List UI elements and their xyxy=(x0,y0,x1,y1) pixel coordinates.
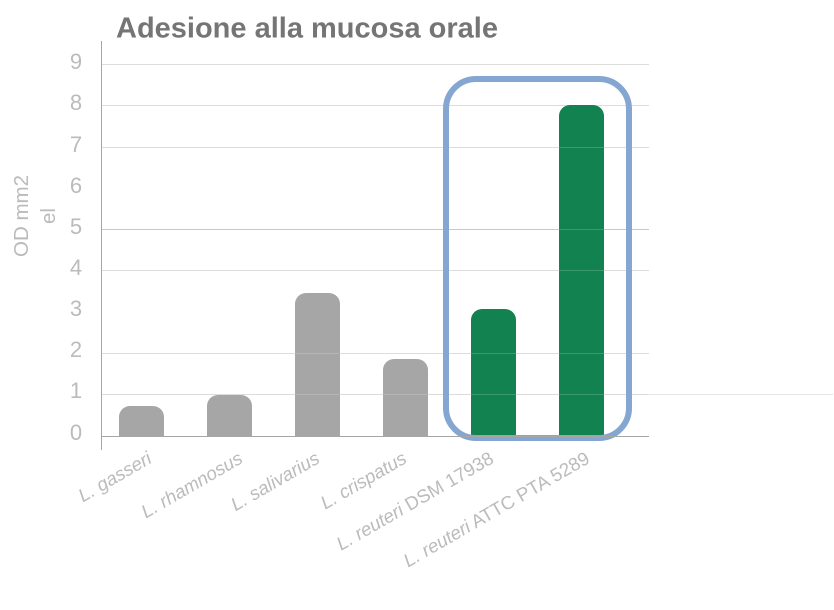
x axis category labels xyxy=(74,447,593,571)
y axis tick labels: 4 xyxy=(70,255,82,280)
highlight box xyxy=(446,79,629,438)
x axis category labels: L. rhamnosus xyxy=(137,447,246,522)
y axis tick labels: 6 xyxy=(70,173,82,198)
x axis category labels: L. reuteri DSM 17938 xyxy=(333,447,497,554)
y axis tick labels: 1 xyxy=(70,378,82,403)
title: Adesione alla mucosa orale xyxy=(116,12,498,44)
y axis tick labels: 9 xyxy=(70,49,82,74)
axes xyxy=(101,41,649,450)
x axis category labels: L. reuteri ATTC PTA 5289 xyxy=(400,447,593,571)
x axis category labels: L. salivarius xyxy=(227,447,323,515)
y axis title: OD mm2 xyxy=(10,175,33,257)
y axis title xyxy=(10,175,60,257)
y axis tick labels: 2 xyxy=(70,337,82,362)
y axis tick labels: 3 xyxy=(70,296,82,321)
y axis tick labels xyxy=(70,49,82,445)
y axis tick labels: 7 xyxy=(70,132,82,157)
y axis tick labels: 8 xyxy=(70,90,82,115)
y axis title: el xyxy=(37,208,60,224)
bars: green L. reuteri strains xyxy=(471,105,604,436)
y axis tick labels: 0 xyxy=(70,420,82,445)
x axis category labels: L. gasseri xyxy=(74,447,156,506)
x axis category labels: L. crispatus xyxy=(317,447,410,513)
y axis tick labels: 5 xyxy=(70,214,82,239)
bars: grey strains xyxy=(119,293,428,436)
